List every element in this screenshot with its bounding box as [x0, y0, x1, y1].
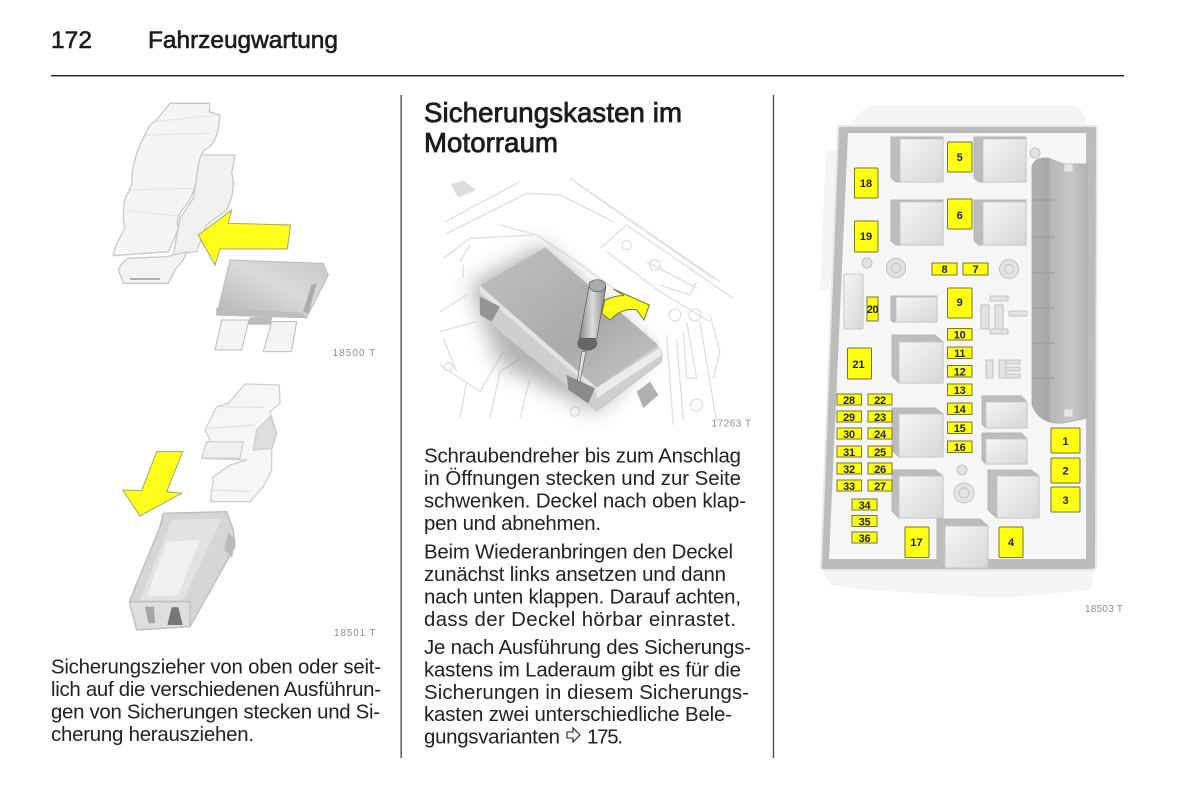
fuse 34: [852, 499, 877, 512]
faint background shapes: [820, 105, 1095, 598]
fuse 29: 29: [843, 412, 855, 424]
column divider right: [773, 95, 774, 758]
fuse 13: 13: [954, 385, 966, 397]
fuse 18: 18: [860, 178, 872, 190]
illustration: fuse puller approaching blade fuse from the side: [113, 103, 375, 359]
fuse 26: [868, 463, 892, 476]
fuse 4: 4: [1008, 537, 1015, 549]
fuse 10: [948, 328, 972, 342]
fuse 16: 16: [954, 442, 966, 454]
fuse 21: 21: [852, 359, 865, 371]
text block: removal instructions: in Öffnungen stecken und zur Seite: [424, 468, 741, 490]
fuse 15: 15: [954, 423, 966, 435]
text block: removal instructions: [424, 446, 746, 535]
text block: fuse box variants: [424, 637, 751, 748]
part number 18500 T: 18500 T: [333, 348, 375, 359]
screwdriver: [577, 280, 606, 382]
fuse 29: [837, 411, 862, 424]
text block: refitting instructions: [424, 542, 741, 631]
fuse 33: 33: [843, 481, 855, 493]
rail clips: [1032, 164, 1073, 417]
part number 18501 T: 18501 T: [334, 628, 376, 639]
fuse box interior: [829, 133, 1086, 559]
fuse 32: [837, 463, 862, 476]
fuse 21: [848, 348, 872, 379]
fuse 13: [948, 384, 972, 397]
fuse 30: 30: [843, 429, 855, 441]
fuse 23: 23: [874, 412, 886, 424]
section heading: Sicherungskasten im: [424, 97, 682, 128]
text block: left column instructions: gen von Sicherungen stecken und Si-: [51, 702, 380, 724]
fuse 35: [852, 516, 877, 528]
fuse 32: 32: [843, 464, 855, 476]
fuse 6: 6: [957, 210, 963, 222]
text block: fuse box variants: Sicherungen in diesem Sicherungs-: [424, 682, 749, 704]
fuse 17: [905, 527, 929, 558]
fuse 30: [837, 428, 862, 441]
fuse 26: 26: [874, 464, 886, 476]
fuse 1: 1: [1062, 436, 1069, 448]
text block: fuse box variants: 175.: [587, 726, 623, 748]
fuse 18: [854, 168, 878, 198]
yellow arrow pointing down-left: [123, 452, 183, 516]
puller: [202, 384, 280, 502]
fuse 3: 3: [1062, 495, 1069, 507]
text block: left column instructions: lich auf die verschiedenen Ausführun-: [51, 679, 381, 701]
fuse 8: 8: [942, 264, 948, 276]
fuse 7: 7: [973, 264, 979, 276]
fuse box housing: [821, 126, 1097, 570]
fuse 31: [837, 446, 862, 459]
fuse 24: [868, 428, 892, 441]
fuse 5: [948, 142, 972, 172]
fuse 20: [867, 297, 878, 321]
illustration: fuse box cover in engine compartment: [440, 178, 751, 430]
small connectors and bolts: [862, 148, 1040, 503]
text block: left column instructions: cherung herausziehen.: [51, 724, 254, 746]
fuse 28: [837, 394, 862, 407]
fuse 5: 5: [957, 152, 963, 164]
fuse 24: 24: [874, 429, 887, 441]
fuse 31: 31: [843, 447, 855, 459]
header rule: [51, 75, 1124, 76]
fuse 7: [963, 263, 988, 276]
fuse 2: 2: [1062, 466, 1069, 478]
fuse 9: 9: [957, 297, 963, 309]
fuse 33: [837, 480, 862, 493]
text block: left column instructions: [51, 656, 381, 746]
puller body: [113, 103, 235, 283]
fuse 27: [868, 480, 892, 493]
fuse 35: 35: [859, 516, 870, 528]
fuse 2: [1051, 458, 1080, 483]
part number 17263 T: 17263 T: [712, 419, 751, 430]
fuse 34: 34: [859, 500, 871, 512]
fuse 8: [932, 263, 957, 276]
fuse 17: 17: [910, 537, 923, 549]
fuse 22: 22: [874, 395, 886, 407]
fuse 12: 12: [954, 366, 966, 378]
fuse 25: [868, 446, 892, 459]
column divider left: [400, 95, 402, 758]
page header title: Fahrzeugwartung: [148, 27, 338, 54]
fuse box cover: [479, 248, 662, 411]
fuse 1: [1051, 428, 1080, 453]
side rail: [1032, 158, 1087, 423]
part number 18503 T: 18503 T: [1085, 604, 1123, 615]
text block: fuse box variants: kastens im Laderaum gibt es für die: [424, 660, 741, 682]
fuse in cartridge: [129, 512, 235, 630]
fuse 10: 10: [954, 330, 966, 342]
fuse 28: 28: [843, 395, 855, 407]
yellow arrow pointing left: [198, 210, 291, 265]
fuse 14: 14: [954, 404, 967, 416]
soft shadow around the box: [470, 245, 653, 412]
fuse 25: 25: [874, 447, 886, 459]
fuse 36: 36: [859, 533, 870, 545]
page number: 172: [51, 27, 92, 54]
fuse 15: [948, 422, 972, 435]
section heading: Motorraum: [424, 127, 558, 158]
fuse 19: [854, 221, 878, 252]
text block: fuse box variants: gungsvarianten: [424, 726, 560, 748]
text block: left column instructions: Sicherungszieher von oben oder seit-: [51, 656, 381, 678]
text block: refitting instructions: dass der Deckel hörbar einrastet.: [424, 609, 736, 631]
blade fuse: [215, 260, 328, 352]
illustration: fuse box diagram: [820, 105, 1123, 615]
relays: [844, 137, 1039, 568]
fuse 16: [948, 441, 972, 454]
fuse 3: [1051, 487, 1080, 512]
text block: refitting instructions: zunächst links ansetzen und dann: [424, 564, 726, 586]
text block: fuse box variants: kasten zwei unterschiedliche Bele-: [424, 704, 732, 726]
fuse 19: 19: [860, 231, 872, 243]
fuse 23: [868, 411, 892, 424]
fuse 36: [852, 532, 877, 545]
fuse 6: [948, 199, 972, 229]
engine bay line art: [440, 178, 733, 425]
fuse 27: 27: [874, 481, 886, 493]
text block: fuse box variants: Je nach Ausführung des Sicherungs-: [424, 637, 751, 659]
illustration: fuse puller lifted with fuse in cartridge: [123, 384, 376, 639]
fuse 12: [948, 366, 972, 378]
section heading: [424, 97, 682, 158]
fuse 9: [948, 288, 972, 318]
fuse 11: [948, 347, 972, 360]
fuse 4: [999, 527, 1023, 558]
fuse 22: [868, 394, 892, 407]
yellow curved arrow: [602, 289, 649, 320]
text block: removal instructions: pen und abnehmen.: [424, 513, 601, 535]
text block: refitting instructions: nach unten klappen. Darauf achten,: [424, 586, 741, 608]
text block: removal instructions: Schraubendreher bis zum Anschlag: [424, 446, 741, 468]
fuse 11: 11: [954, 348, 965, 360]
text block: refitting instructions: Beim Wiederanbringen den Deckel: [424, 542, 733, 564]
text block: removal instructions: schwenken. Deckel nach oben klap-: [424, 490, 746, 512]
fuse 14: [948, 403, 972, 416]
fuse 20: 20: [867, 304, 878, 316]
